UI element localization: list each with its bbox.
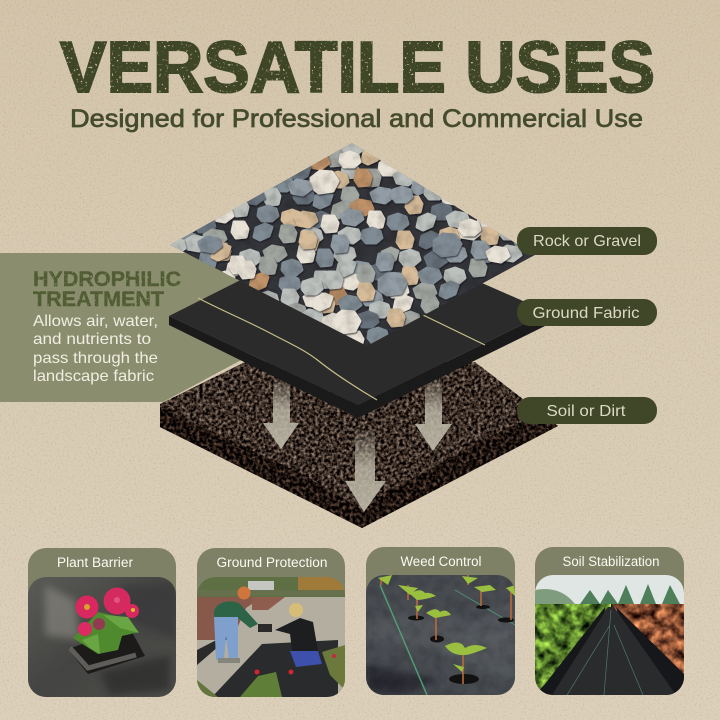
card title: Weed Control: [400, 554, 482, 569]
title: VERSATILE USES: [60, 28, 655, 108]
heading: hydrophilic treatment: TREATMENT: [33, 288, 164, 311]
label: rock or gravel: [517, 227, 657, 255]
body text: pass through the: [33, 350, 158, 367]
photo: seedlings through fabric: [366, 575, 515, 695]
card: ground protection: [197, 548, 345, 697]
arrow: right: [415, 378, 452, 451]
photo: two people laying fabric: [197, 577, 345, 697]
body text: Allows air, water,: [33, 313, 158, 330]
layer: soil: [160, 362, 558, 528]
stitch lines: [198, 298, 485, 400]
flower accents: [254, 670, 260, 674]
layer: rock or gravel: [165, 140, 536, 348]
subtitle: Designed for Professional and Commercial Use: [70, 105, 643, 133]
panel: hydrophilic treatment: [0, 253, 245, 402]
arrow: centre: [345, 430, 386, 512]
card title: Ground Protection: [216, 555, 328, 570]
card: plant barrier: [28, 548, 176, 697]
heading: hydrophilic treatment: HYDROPHILIC: [33, 268, 181, 291]
panel background: [0, 253, 245, 402]
layer: ground fabric: [169, 225, 548, 418]
arrow: left: [263, 378, 299, 449]
photo: fabric row in greenhouse: [535, 575, 684, 695]
label: soil or dirt: Soil or Dirt: [546, 403, 626, 420]
label: soil or dirt: [517, 397, 657, 424]
label: ground fabric: [517, 299, 657, 326]
heading: hydrophilic treatment: [33, 268, 181, 311]
person standing: [214, 601, 258, 628]
person kneeling: [275, 618, 318, 651]
card: weed control: [366, 547, 515, 695]
body text: [33, 313, 158, 385]
label: rock or gravel: Rock or Gravel: [533, 233, 641, 250]
card title: Plant Barrier: [57, 555, 134, 570]
label: ground fabric: Ground Fabric: [532, 305, 640, 322]
card: soil stabilization: [535, 547, 684, 695]
body text: and nutrients to: [33, 331, 151, 348]
card title: Soil Stabilization: [562, 554, 660, 569]
body text: landscape fabric: [33, 368, 154, 385]
seedlings: [381, 575, 511, 684]
photo: flowers on fabric: [28, 577, 176, 697]
